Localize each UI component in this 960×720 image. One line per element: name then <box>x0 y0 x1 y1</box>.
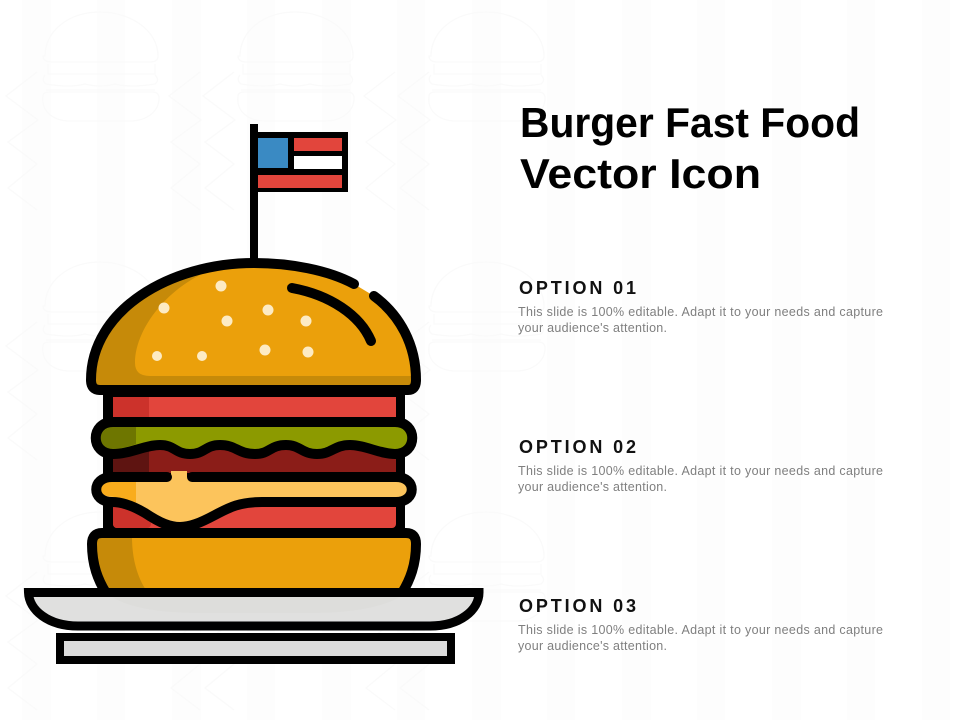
background watermark pattern <box>6 12 545 710</box>
option 01: This slide is 100% editable. Adapt it to your needs and capture <box>518 305 883 319</box>
option 03: OPTION 03 <box>519 596 636 616</box>
plate <box>28 592 479 626</box>
option 01 <box>518 278 883 335</box>
option 02: your audience's attention. <box>518 480 667 494</box>
sesame seeds <box>152 280 314 361</box>
option 02: This slide is 100% editable. Adapt it to your needs and capture <box>518 464 883 478</box>
bun highlight <box>292 288 371 341</box>
plate base <box>60 637 451 660</box>
bottom bun <box>92 533 416 593</box>
option 01: your audience's attention. <box>518 321 667 335</box>
option 02 <box>518 437 883 494</box>
option 03: your audience's attention. <box>518 639 667 653</box>
icon: burger on plate <box>28 124 479 660</box>
option 03: This slide is 100% editable. Adapt it to your needs and capture <box>518 623 883 637</box>
lettuce <box>96 422 412 454</box>
cheese <box>96 471 412 527</box>
option 03 <box>518 596 883 653</box>
option 01: OPTION 01 <box>519 278 636 298</box>
option 02: OPTION 02 <box>519 437 636 457</box>
title: Burger Fast Food <box>520 99 860 146</box>
dark patty <box>103 445 405 480</box>
bottom patty <box>103 498 405 534</box>
top bun <box>91 263 416 390</box>
title <box>520 99 860 197</box>
icon: flag <box>250 124 348 264</box>
top patty <box>103 392 405 422</box>
title: Vector Icon <box>520 150 761 197</box>
